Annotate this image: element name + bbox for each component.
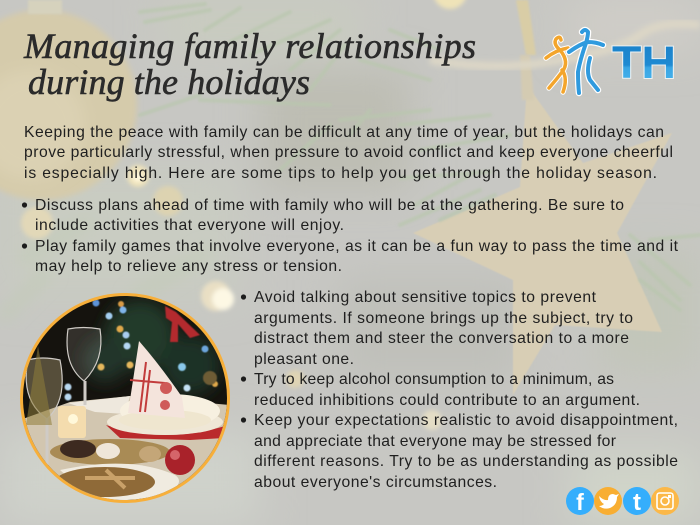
bokeh dots	[64, 300, 218, 400]
lower bullet list: Keep your expectations realistic to avoid disappointment,	[254, 412, 678, 429]
gold star	[413, 85, 672, 395]
upper bullet list: may help to relieve any stress or tension.	[35, 258, 342, 275]
intro paragraph: is especially high. Here are some tips to help you get through the holiday season.	[24, 165, 657, 182]
circular photo: festive table	[20, 293, 230, 503]
tree glow	[83, 300, 220, 395]
red and white napkin	[128, 341, 185, 418]
upper bullet list: include activities that everyone will enjoy.	[35, 217, 344, 234]
wine glasses	[26, 328, 101, 465]
lower bullet list: distract them and steer the conversation to a more	[254, 330, 629, 347]
icon: orange figure	[546, 37, 568, 92]
candle	[58, 406, 86, 438]
gold bauble	[0, 10, 137, 200]
social icons	[566, 487, 679, 516]
cookies	[50, 439, 170, 465]
intro paragraph: prove particularly stressful, when pressure to avoid conflict and keep everyone cheerful	[24, 144, 673, 161]
lower bullet list	[241, 289, 678, 491]
icon: twitter	[594, 487, 622, 515]
lower bullet list: Try to keep alcohol consumption to a minimum, as	[254, 371, 614, 388]
logo: TH	[546, 30, 676, 93]
upper bullet list	[22, 197, 679, 275]
red bow	[165, 306, 200, 342]
lower bullet list: different reasons. Try to be as understanding as possible	[254, 453, 678, 470]
lower bullet list: and appreciate that everyone may be stressed for	[254, 433, 616, 450]
lower bullet list: Avoid talking about sensitive topics to prevent	[254, 289, 597, 306]
bokeh lights	[21, 0, 467, 430]
bead garland	[430, 24, 700, 66]
pine needles	[140, 4, 700, 310]
red bauble	[165, 445, 195, 475]
lower bullet list: reduced inhibitions could contribute to an argument.	[254, 392, 640, 409]
upper bullet list: Play family games that involve everyone, as it can be a fun way to pass the time and it	[35, 238, 679, 255]
plates	[107, 414, 223, 435]
title: during the holidays	[28, 62, 310, 102]
gold tower decoration	[26, 346, 52, 425]
intro paragraph	[24, 124, 673, 182]
lower bullet list: pleasant one.	[254, 351, 354, 368]
icon: tumblr: t	[633, 489, 641, 516]
icon: facebook: f	[576, 489, 584, 515]
title	[23, 26, 476, 102]
upper bullet list: Discuss plans ahead of time with family who will be at the gathering. Be sure to	[35, 197, 624, 214]
title: Managing family relationships	[23, 26, 476, 66]
wordmark: TH	[612, 37, 676, 88]
red placemat	[106, 425, 228, 440]
lower bullet list: about everyone's circumstances.	[254, 474, 497, 491]
lower bullet list: arguments. If someone brings up the subject, try to	[254, 310, 633, 327]
table	[20, 396, 230, 503]
icon: blue figure	[569, 30, 603, 93]
icon: instagram	[651, 487, 679, 515]
intro paragraph: Keeping the peace with family can be difficult at any time of year, but the holidays can	[24, 124, 664, 141]
